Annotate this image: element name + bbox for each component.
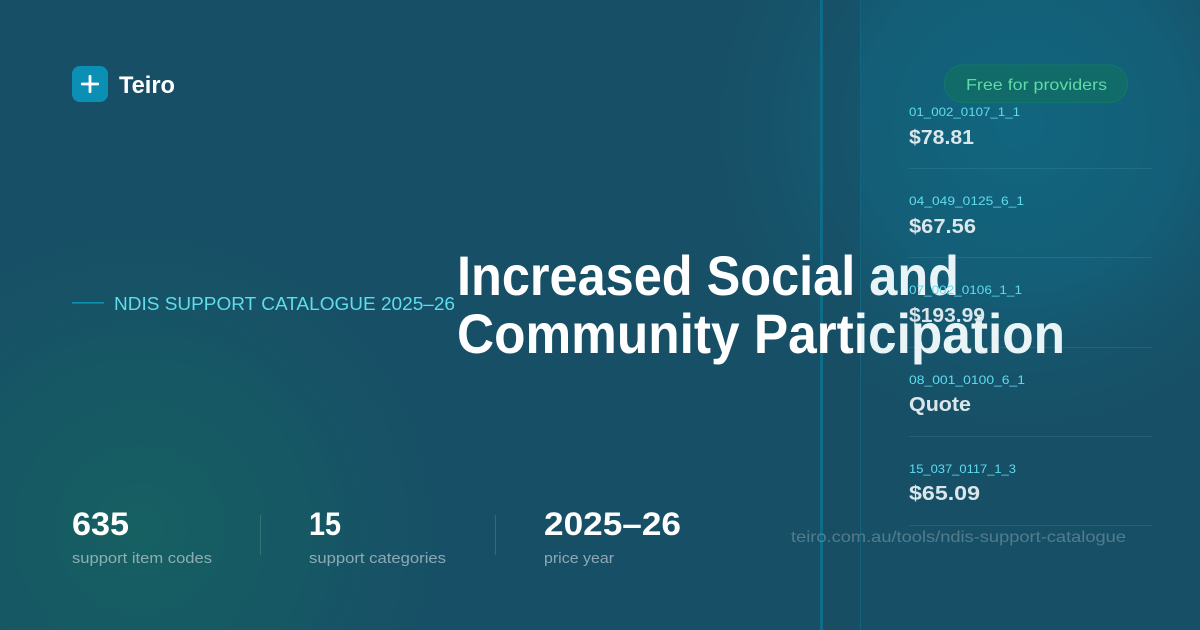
stat: categories: support categories xyxy=(309,550,446,567)
stat: item codes: 635 xyxy=(72,506,129,542)
stat: categories xyxy=(309,506,446,567)
title xyxy=(457,244,1065,365)
stat: price year xyxy=(544,506,681,567)
stat: categories: 15 xyxy=(309,506,341,542)
eyebrow: NDIS SUPPORT CATALOGUE 2025–26 xyxy=(114,294,455,314)
item 5: $65.09 xyxy=(909,483,980,505)
stat: item codes: support item codes xyxy=(72,550,212,567)
vertical rail lines xyxy=(820,0,861,630)
item 3: 07_002_0106_1_1 xyxy=(909,283,1022,297)
item 3 xyxy=(909,283,1152,348)
wordmark: Teiro xyxy=(119,72,175,99)
icon: plus tile xyxy=(72,66,108,102)
item 4: 08_001_0100_6_1 xyxy=(909,373,1025,387)
stat: price year: price year xyxy=(544,550,614,567)
item 4 xyxy=(909,373,1152,437)
title: Increased Social and xyxy=(457,244,959,307)
title: Community Participation xyxy=(457,302,1065,365)
item 2: 04_049_0125_6_1 xyxy=(909,194,1024,208)
footer url: teiro.com.au/tools/ndis-support-catalogue xyxy=(791,529,1126,546)
panel: support item list xyxy=(909,105,1152,526)
item 1: 01_002_0107_1_1 xyxy=(909,105,1020,119)
item 4: Quote xyxy=(909,394,971,416)
item 2 xyxy=(909,194,1152,258)
badge: free for providers: Free for providers xyxy=(966,77,1107,94)
stats row xyxy=(72,506,681,567)
badge: free for providers xyxy=(944,65,1128,102)
item 5 xyxy=(909,462,1152,526)
logo xyxy=(72,66,175,102)
stat: price year: 2025–26 xyxy=(544,506,681,542)
item 1 xyxy=(909,105,1152,169)
item 2: $67.56 xyxy=(909,216,976,238)
stat: item codes xyxy=(72,506,212,567)
item 3: $193.99 xyxy=(909,305,985,327)
item 5: 15_037_0117_1_3 xyxy=(909,462,1016,476)
item 1: $78.81 xyxy=(909,127,974,149)
